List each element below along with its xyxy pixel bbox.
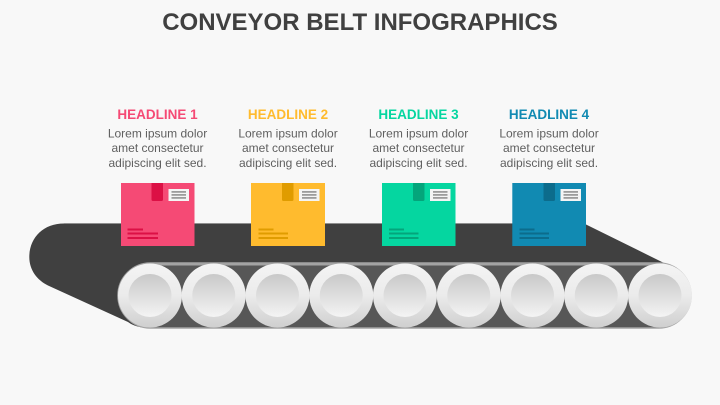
roller 3 (246, 264, 310, 328)
headline 1: HEADLINE 1 (117, 107, 198, 122)
body 3: adipiscing elit sed. (369, 156, 468, 170)
roller 2 (182, 264, 246, 328)
box 3 (382, 183, 456, 246)
shipping lines (128, 228, 158, 239)
body 3: amet consectetur (372, 141, 465, 155)
headline 2: HEADLINE 2 (248, 107, 328, 122)
rollers (118, 264, 692, 328)
roller 6 (437, 264, 501, 328)
box 2 (251, 183, 325, 246)
text block 2 (238, 107, 338, 170)
text block 4 (499, 107, 599, 170)
tape (152, 183, 163, 201)
body 1: Lorem ipsum dolor (108, 126, 207, 140)
text block 3 (369, 107, 468, 170)
label (299, 189, 320, 201)
body 2: amet consectetur (242, 141, 334, 155)
title: CONVEYOR BELT INFOGRAPHICS (162, 9, 558, 36)
box 4 (512, 183, 586, 246)
body 2: adipiscing elit sed. (239, 156, 337, 170)
tape (544, 183, 555, 201)
roller 5 (373, 264, 437, 328)
roller 9 (628, 264, 692, 328)
roller 8 (564, 264, 628, 328)
shipping lines (520, 228, 549, 239)
roller 1 (118, 264, 182, 328)
body 3: Lorem ipsum dolor (369, 126, 468, 140)
label (560, 189, 581, 201)
tape (282, 183, 294, 201)
roller 4 (309, 264, 373, 328)
body 1: adipiscing elit sed. (108, 156, 207, 170)
label (168, 189, 189, 201)
body 2: Lorem ipsum dolor (238, 126, 338, 140)
body 4: adipiscing elit sed. (500, 156, 598, 170)
roller 7 (500, 264, 564, 328)
text block 1 (108, 107, 207, 170)
tape (413, 183, 424, 201)
headline 3: HEADLINE 3 (378, 107, 459, 122)
belt top edge (64, 223, 584, 224)
body 1: amet consectetur (111, 141, 204, 155)
shipping lines (258, 228, 288, 239)
roller track (118, 262, 691, 328)
headline 4: HEADLINE 4 (509, 107, 590, 122)
label (430, 189, 450, 201)
body 4: amet consectetur (503, 141, 595, 155)
box 1 (121, 183, 194, 246)
conveyor belt body (29, 224, 664, 328)
shipping lines (389, 228, 418, 239)
body 4: Lorem ipsum dolor (499, 126, 599, 140)
